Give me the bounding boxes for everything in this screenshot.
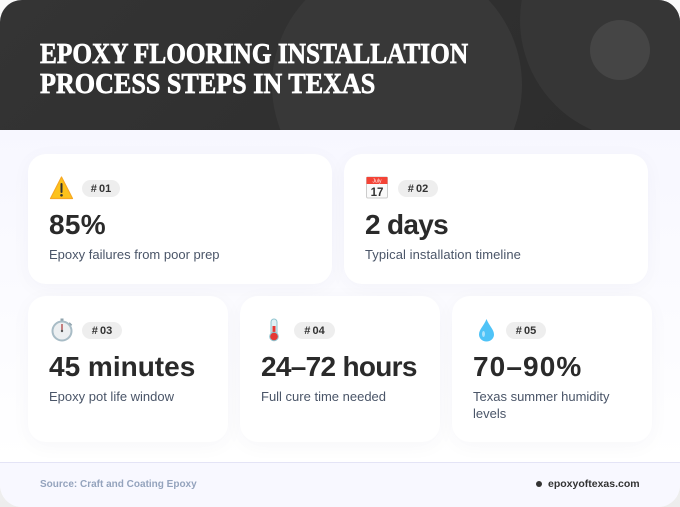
badge 01 (82, 180, 120, 197)
badge 01: # 01 (91, 183, 111, 195)
footer (0, 462, 680, 507)
value: 85% (49, 209, 106, 240)
stat card 2 (344, 154, 648, 284)
description: Full cure time needed (261, 389, 386, 404)
badge 05 (506, 322, 546, 339)
website: epoxyoftexas.com (548, 478, 640, 490)
stat card 5 (452, 296, 652, 442)
stat card 4 (240, 296, 440, 442)
value: 70–90% (473, 351, 582, 382)
badge 02: # 02 (408, 183, 428, 195)
icon: calendar: 17 (371, 187, 383, 199)
header decorative circles (282, 0, 680, 130)
stat card 3 (28, 296, 228, 442)
badge 04: # 04 (304, 325, 325, 337)
icon: calendar: July (373, 178, 382, 184)
description: Epoxy failures from poor prep (49, 247, 220, 262)
value: 24–72 hours (261, 351, 417, 382)
icon: water drop (479, 319, 494, 342)
icon: stopwatch (52, 318, 72, 342)
value: 2 days (365, 209, 448, 240)
description: Typical installation timeline (365, 247, 521, 262)
description: Epoxy pot life window (49, 389, 174, 404)
value: 45 minutes (49, 351, 195, 382)
badge 02 (398, 180, 438, 197)
icon: calendar (366, 176, 388, 199)
badge 04 (294, 322, 335, 339)
description: Texas summer humidity levels (473, 389, 610, 421)
stat card 1 (28, 154, 332, 284)
icon: thermometer (269, 318, 279, 342)
source: Source: Craft and Coating Epoxy (40, 479, 197, 490)
badge 03: # 03 (92, 325, 112, 337)
icon: warning sign (50, 176, 74, 200)
title (40, 38, 468, 100)
badge 03 (82, 322, 122, 339)
badge 05: # 05 (516, 325, 536, 337)
header banner (0, 0, 680, 130)
title: EPOXY FLOORING INSTALLATION (40, 38, 468, 70)
title: PROCESS STEPS IN TEXAS (40, 68, 375, 100)
